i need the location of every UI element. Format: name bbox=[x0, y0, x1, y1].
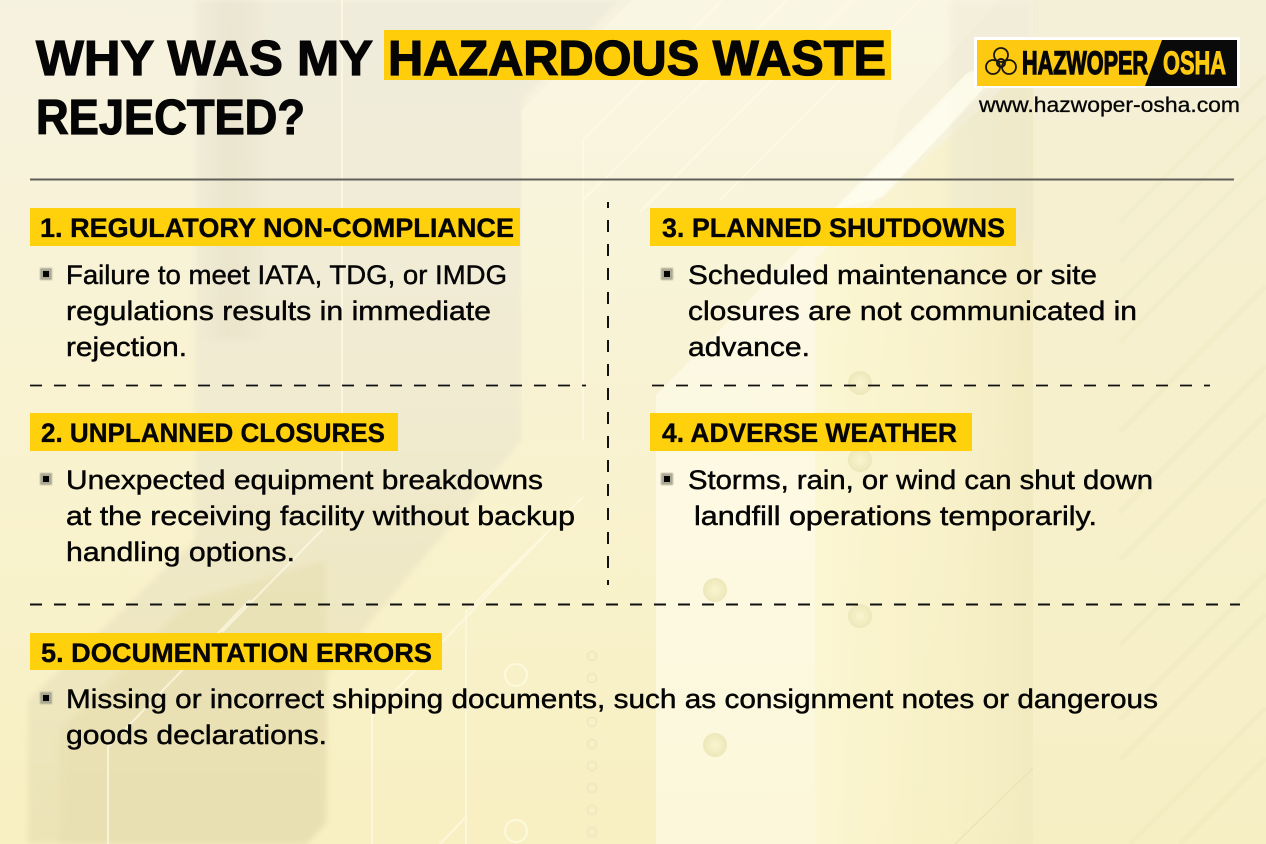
body 4: landfill operations temporarily. bbox=[694, 501, 1097, 531]
heading bar 3 bbox=[650, 208, 1016, 246]
body 4: Storms, rain, or wind can shut down bbox=[688, 465, 1153, 495]
title highlighted words: HAZARDOUS WASTE bbox=[388, 32, 886, 86]
heading 3: 3. PLANNED SHUTDOWNS bbox=[662, 213, 1005, 243]
heading 2: 2. UNPLANNED CLOSURES bbox=[41, 418, 385, 448]
logo OSHA: OSHA bbox=[1163, 45, 1226, 81]
body 1 bbox=[66, 260, 507, 362]
panel: documentation errors bbox=[30, 633, 1158, 750]
heading bar 5 bbox=[30, 633, 442, 670]
logo wordmark: HAZWOPER bbox=[1022, 45, 1148, 81]
heading bar 2 bbox=[30, 413, 398, 451]
heading 5: 5. DOCUMENTATION ERRORS bbox=[41, 638, 432, 668]
website url: www.hazwoper-osha.com bbox=[978, 94, 1240, 117]
body 1: Failure to meet IATA, TDG, or IMDG bbox=[66, 260, 507, 290]
title bbox=[36, 30, 891, 145]
body 3 bbox=[688, 260, 1137, 362]
body 5 bbox=[66, 684, 1158, 750]
body 4 bbox=[688, 465, 1153, 531]
body 5: Missing or incorrect shipping documents, such as consignment notes or dangerous bbox=[66, 684, 1158, 714]
body 2: Unexpected equipment breakdowns bbox=[66, 465, 543, 495]
bullet 4 bbox=[661, 473, 673, 485]
title line 2: REJECTED? bbox=[36, 91, 305, 145]
title highlight bbox=[384, 30, 891, 80]
body 3: advance. bbox=[688, 332, 810, 362]
body 3: Scheduled maintenance or site bbox=[688, 260, 1097, 290]
icon: biohazard bbox=[986, 48, 1016, 74]
heading bar 4 bbox=[650, 413, 972, 451]
body 2: at the receiving facility without backup bbox=[66, 501, 575, 531]
bullet 3 bbox=[661, 268, 673, 280]
body 1: regulations results in immediate bbox=[66, 296, 491, 326]
body 1: rejection. bbox=[66, 332, 187, 362]
bullet 5 bbox=[40, 692, 52, 704]
logo bbox=[974, 37, 1240, 88]
heading bar 1 bbox=[30, 208, 520, 246]
title line 1: WHY WAS MY bbox=[36, 32, 373, 86]
panel: planned shutdowns bbox=[650, 208, 1137, 362]
body 2 bbox=[66, 465, 575, 567]
bullet 1 bbox=[40, 268, 52, 280]
panel: unplanned closures bbox=[30, 413, 575, 567]
body 5: goods declarations. bbox=[66, 720, 327, 750]
heading 4: 4. ADVERSE WEATHER bbox=[662, 418, 957, 448]
heading 1: 1. REGULATORY NON-COMPLIANCE bbox=[40, 213, 514, 243]
panel: regulatory non-compliance bbox=[30, 208, 520, 362]
body 3: closures are not communicated in bbox=[688, 296, 1137, 326]
panel: adverse weather bbox=[650, 413, 1153, 531]
bullet 2 bbox=[40, 473, 52, 485]
body 2: handling options. bbox=[66, 537, 295, 567]
